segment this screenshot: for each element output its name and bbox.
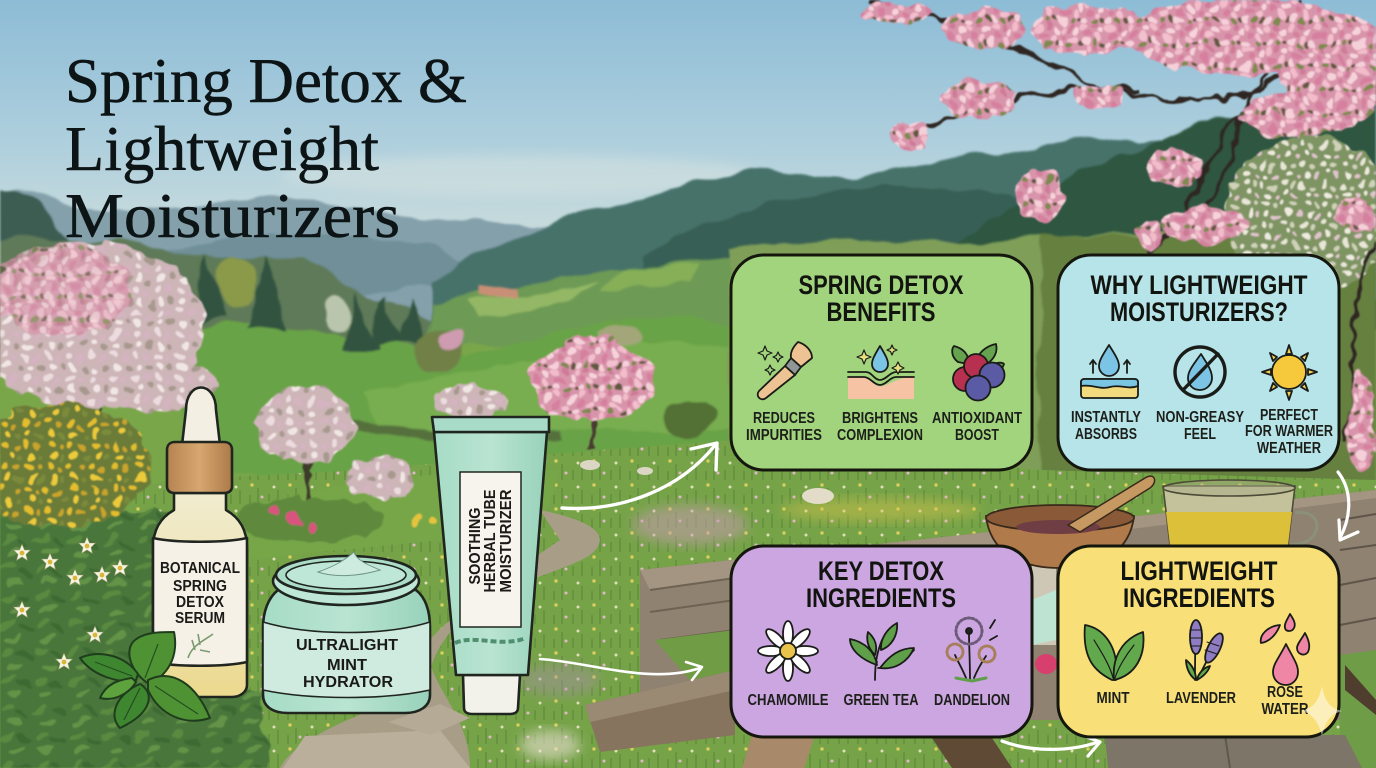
benefit labels: IMPURITIES <box>746 427 822 444</box>
icon: dandelion <box>947 618 997 681</box>
icon: skin with drop <box>848 345 914 399</box>
arrow: key ingredients to lightweight ingredients <box>1002 735 1100 756</box>
background: sky <box>0 0 1376 300</box>
benefit labels: COMPLEXION <box>837 427 923 444</box>
serum label: SERUM <box>175 610 225 627</box>
title: Lightweight <box>65 113 379 184</box>
ingredient labels: WATER <box>1262 701 1308 718</box>
serum label <box>153 538 247 666</box>
benefit labels: REDUCES <box>753 410 815 427</box>
reason labels: PERFECT <box>1260 407 1318 424</box>
background: flower meadow <box>0 440 1376 768</box>
icon: green tea <box>850 623 914 680</box>
icon: no grease drop <box>1175 347 1225 397</box>
tube cap <box>463 675 520 714</box>
heading <box>806 556 956 613</box>
serum dropper bulb <box>182 388 220 445</box>
heading <box>1090 270 1308 327</box>
background: tree behind products <box>235 387 437 542</box>
reason labels <box>1071 407 1333 457</box>
heading: WHY LIGHTWEIGHT <box>1090 270 1308 300</box>
background: distant hills <box>0 70 1376 370</box>
arrow: products to benefits <box>562 443 717 508</box>
serum wooden cap <box>167 442 232 493</box>
heading: INGREDIENTS <box>1123 583 1275 613</box>
reason labels: INSTANTLY <box>1071 409 1142 426</box>
title: Moisturizers <box>65 180 400 251</box>
heading: MOISTURIZERS? <box>1110 297 1288 327</box>
product: botanical spring detox serum bottle <box>153 388 247 697</box>
heading <box>798 270 964 327</box>
benefit labels: BRIGHTENS <box>842 410 918 427</box>
tube crimp <box>432 417 549 432</box>
jar body <box>263 590 430 713</box>
jar label: HYDRATOR <box>303 674 393 691</box>
icon: sun <box>1262 345 1317 400</box>
jar label: ULTRALIGHT <box>296 637 398 654</box>
icon: mint leaves foreground <box>80 632 210 728</box>
ingredient labels: GREEN TEA <box>844 692 918 709</box>
heading <box>1120 556 1278 613</box>
title <box>65 45 467 251</box>
heading: SPRING DETOX <box>798 270 964 300</box>
icon: absorbing sponge <box>1081 345 1138 398</box>
ingredient labels: LAVENDER <box>1166 690 1236 707</box>
jar rim and cream <box>273 552 419 605</box>
ingredient labels: DANDELION <box>934 692 1010 709</box>
icon: sparkle watermark <box>1302 686 1342 736</box>
background: stone path <box>280 510 600 768</box>
serum glass bottle <box>153 493 247 697</box>
reason labels: FEEL <box>1184 426 1216 443</box>
title: Spring Detox & <box>65 45 467 116</box>
reason labels: ABSORBS <box>1075 426 1137 443</box>
reason labels: NON-GREASY <box>1156 409 1245 426</box>
ingredient labels <box>748 692 1010 709</box>
ingredient labels: MINT <box>1096 690 1130 707</box>
product: soothing herbal tube moisturizer <box>432 417 549 714</box>
tube label: HERBAL TUBE <box>482 489 499 592</box>
heading: BENEFITS <box>826 297 936 327</box>
panel: spring detox benefits <box>731 255 1032 470</box>
serum label: BOTANICAL <box>160 560 240 577</box>
icon: berries <box>952 344 1004 400</box>
jar label <box>263 622 430 698</box>
heading: LIGHTWEIGHT <box>1120 556 1278 586</box>
panel: lightweight ingredients <box>1058 546 1339 737</box>
benefit labels: BOOST <box>955 427 999 444</box>
icon: mint <box>1085 625 1144 680</box>
icon: brush <box>758 342 812 399</box>
icon: lavender <box>1186 620 1226 680</box>
ingredient labels: CHAMOMILE <box>748 692 828 709</box>
panel: key detox ingredients <box>731 546 1032 737</box>
product: ultralight mint hydrator jar <box>263 552 430 713</box>
background: picnic table with bench <box>585 490 1376 768</box>
heading: INGREDIENTS <box>806 583 956 613</box>
background: left garden foliage <box>0 243 270 768</box>
benefit labels <box>746 410 1022 444</box>
icon: chamomile <box>758 621 818 681</box>
tube body <box>434 432 547 675</box>
herb bowl with wooden spoon <box>986 476 1155 568</box>
background: top right blossom tree <box>859 0 1376 472</box>
reason labels: FOR WARMER <box>1245 423 1333 440</box>
glass tea cup <box>1163 480 1317 545</box>
heading: KEY DETOX <box>818 556 944 586</box>
serum label: SPRING <box>173 578 227 595</box>
jar label: MINT <box>327 657 367 674</box>
reason labels: WEATHER <box>1257 440 1321 457</box>
ingredient labels <box>1096 684 1308 718</box>
panel: why lightweight moisturizers <box>1058 255 1339 470</box>
arrow: products to key ingredients <box>540 659 702 680</box>
serum label: DETOX <box>176 594 224 611</box>
tube label <box>460 472 521 627</box>
background: blossom tree in the valley <box>432 334 654 450</box>
icon: rose water <box>1261 614 1309 685</box>
ingredient labels: ROSE <box>1267 684 1303 701</box>
background: rolling fields <box>180 225 1376 500</box>
tube label: MOISTURIZER <box>498 489 515 592</box>
tube label: SOOTHING <box>467 508 484 584</box>
arrow: why lightweight to lightweight ingredients <box>1338 472 1358 540</box>
benefit labels: ANTIOXIDANT <box>932 410 1022 427</box>
